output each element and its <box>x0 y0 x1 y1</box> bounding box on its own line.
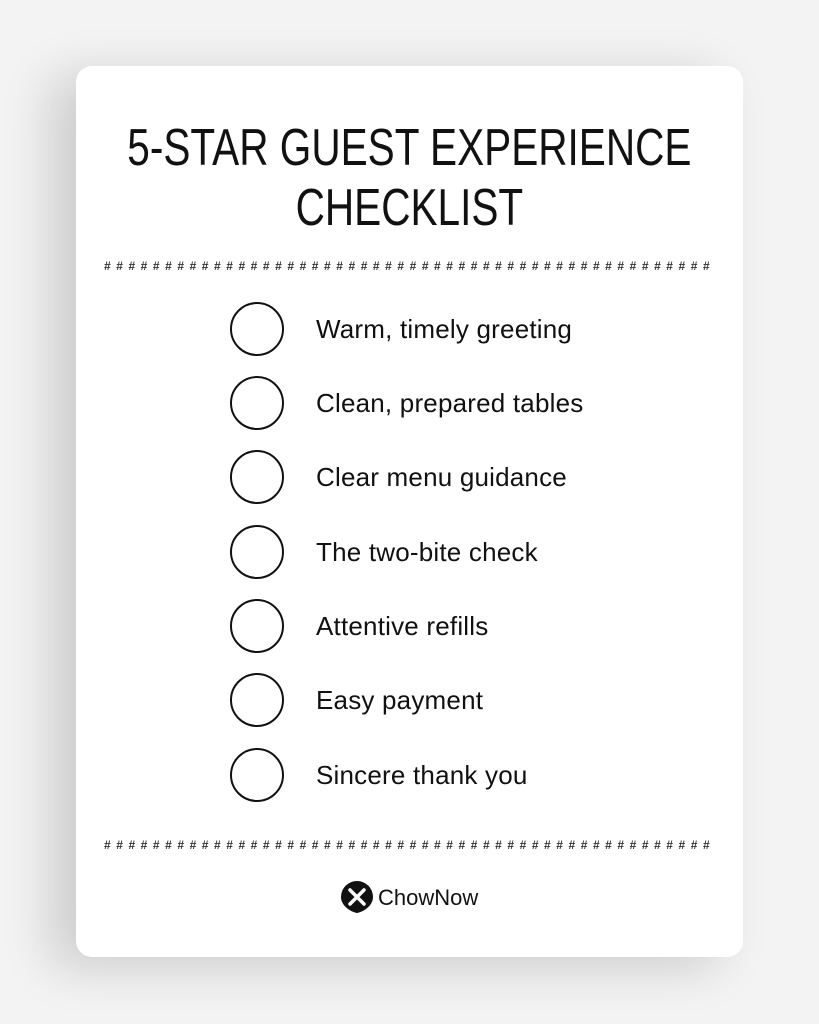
title: 5-STAR GUEST EXPERIENCE <box>127 119 691 177</box>
title <box>127 119 691 237</box>
item 6 <box>230 673 483 727</box>
title: CHECKLIST <box>296 179 523 237</box>
item 5: Attentive refills <box>316 611 488 641</box>
item 1 <box>230 302 572 356</box>
item 2: Clean, prepared tables <box>316 388 583 418</box>
item 6: Easy payment <box>316 685 483 715</box>
icon: fork and knife pin <box>341 881 373 913</box>
item 3: Clear menu guidance <box>316 462 567 492</box>
item 7: Sincere thank you <box>316 760 528 790</box>
checklist <box>230 302 583 802</box>
item 3 <box>230 450 567 504</box>
card panel <box>76 66 743 957</box>
item 1: Warm, timely greeting <box>316 314 572 344</box>
item 4 <box>230 525 538 579</box>
logo: ChowNow: ChowNow <box>378 885 478 910</box>
bottom hash divider: ################################################## <box>104 838 715 852</box>
item 4: The two-bite check <box>316 537 538 567</box>
logo: ChowNow <box>341 881 478 913</box>
top hash divider: ################################################## <box>104 259 715 273</box>
item 7 <box>230 748 528 802</box>
item 2 <box>230 376 583 430</box>
item 5 <box>230 599 488 653</box>
